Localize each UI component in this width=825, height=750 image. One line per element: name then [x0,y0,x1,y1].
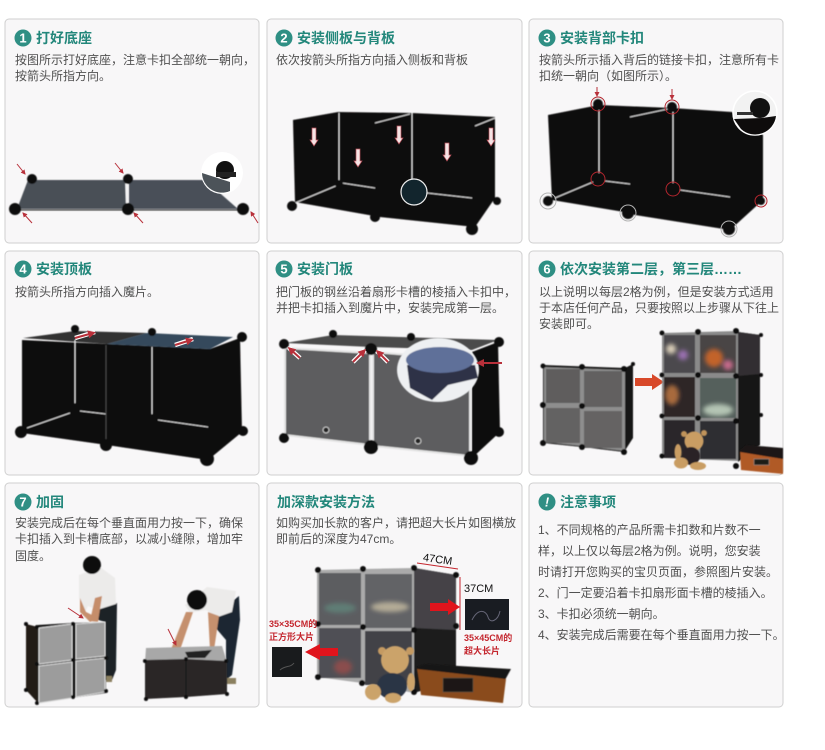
icon: clip detail circle [401,179,427,205]
text: notes list: 时请打开您购买的宝贝页面，参照图片安装。 [538,564,778,579]
arrows: downward pointers [310,126,495,167]
icon: number 2 [276,30,292,46]
arrows: door insertion [289,348,502,363]
text: notes list: 3、卡扣必须统一朝向。 [538,606,665,621]
panel: step 1 base [5,19,259,243]
dimension: height 37CM: 37CM [464,583,493,595]
heading: step 2: 安装侧板与背板 [297,30,395,46]
text: step 7 description: 卡扣插入到卡槽底部，以减小缝隙，增加牢 [15,531,243,546]
text: step 3 description: 按箭头所示插入背后的链接卡扣，注意所有卡 [539,52,779,67]
heading: step 6: 依次安装第二层，第三层…… [560,261,742,277]
text: step 1 description: 按图所示打好底座，注意卡扣全部统一朝向， [15,52,255,67]
panel: extended depth method [267,483,522,707]
illustration: man pressing cabinet [79,556,117,682]
arrows: red pointers [17,163,258,223]
heading: step 4: 安装顶板 [36,261,92,277]
text: step 6 description: 于本店任何产品，只要按照以上步骤从下往上 [539,300,779,315]
text: step 2 description: 依次按箭头所指方向插入侧板和背板 [276,52,468,67]
icon: number 6: 6 [543,262,551,276]
text: step 4 description: 按箭头所指方向插入魔片。 [15,284,159,299]
illustration: side and back panels [287,112,501,235]
text: step 6 description: 以上说明以每层2格为例，但是安装方式适用 [539,284,774,299]
text: step 7 description: 安装完成后在每个垂直面用力按一下，确保 [15,515,243,530]
icon: storage box [740,445,783,474]
arrows: top panel direction [75,332,193,345]
text: step 7 description [15,515,243,563]
icon: teddy bear [674,430,707,470]
icon: number 3 [538,30,556,46]
panel: step 7 reinforce [5,483,259,707]
text: notes list: 样，以上仅以每层2格为例。说明，您安装 [538,543,761,558]
illustration: man bending over cabinet [170,587,240,684]
illustration: assembled back [543,99,765,235]
illustration: base plates [9,174,249,215]
panel: step 2 side and back [267,19,522,243]
dimension: width 47CM: 47CM [422,552,453,568]
heading: step 5: 安装门板 [297,261,353,277]
text: step 5 description: 并把卡扣插入到魔片中，安装完成第一层。 [276,300,504,315]
icon: number 5 [276,260,292,278]
text: notes list: 1、不同规格的产品所需卡扣数和片数不一 [538,522,761,537]
label: square panel size: 正方形大片 [269,631,314,642]
text: step 7 description: 固度。 [15,548,51,563]
panel: step 5 door panel [267,251,522,475]
text: step 3 description: 扣统一朝向（如图所示）。 [539,68,677,83]
label: long panel size: 35×45CM的 [464,632,512,643]
label: long panel size [464,632,512,656]
text: step 5 description [276,284,516,315]
icon: square panel swatch [272,647,302,677]
illustration: patterned cabinet [315,565,459,695]
heading: extended depth: 加深款安装方法 [277,494,375,510]
heading: step 1: 打好底座 [36,30,92,46]
icon: exclamation: ! [545,494,550,510]
illustration: black cabinet [143,646,229,701]
dimension: height 37CM [460,577,493,630]
icon: teddy bear [365,646,415,703]
arrows: press direction [68,608,176,645]
text: notes list [538,522,785,642]
text: step 1 description: 按箭头所指方向。 [15,68,111,83]
arrow: red to next stage [635,374,664,390]
icon: number 6 [538,260,556,278]
illustration: three-level cabinet [660,328,763,469]
icon: number 7: 7 [19,494,27,510]
text: step 5 description: 把门板的钢丝沿着扇形卡槽的棱插入卡扣中， [276,284,516,299]
arrow: red to square panel [305,644,338,660]
illustration: cube with doors [279,330,504,465]
icon: number 1 [14,30,32,46]
panel: step 4 top panel [5,251,259,475]
label: square panel size [269,618,317,642]
text: extended depth description [276,515,516,546]
panel: step 3 back clips [529,19,783,243]
icon: number 4: 4 [19,262,27,276]
icon: number 3: 3 [543,30,551,46]
arrow: red to long panel [430,599,460,615]
heading: step 3: 安装背部卡扣 [560,30,644,46]
icon: large long panel swatch [465,599,509,630]
icon: clip inset [733,91,777,135]
text: step 6 description [539,284,779,331]
label: long panel size: 超大长片 [464,645,500,656]
icon: clip detail inset [201,152,243,194]
text: extended depth description: 如购买加长款的客户，请把超大长片如图横放 [276,515,516,530]
icon: number 1: 1 [19,30,27,46]
icon: wooden storage box [417,664,511,703]
text: step 3 description [539,52,779,83]
icon: number 7 [14,494,32,510]
illustration: cube with top panels [15,325,248,466]
icon: number 5: 5 [280,262,288,276]
illustration: two-level cabinet [540,362,635,455]
label: square panel size: 35×35CM的 [269,618,317,629]
icon: number 4 [14,260,32,278]
heading: notes: 注意事项 [560,494,616,510]
text: step 6 description: 安装即可。 [539,316,599,331]
icon: number 2: 2 [280,30,288,46]
markers: red and gray rings [540,97,767,237]
text: extended depth description: 即前后的深度为47cm。 [276,531,401,546]
heading: step 7: 加固 [36,494,64,510]
arrows: red pointers [597,87,672,99]
panel: step 6 more layers [529,251,783,475]
text: notes list: 2、门一定要沿着卡扣扇形面卡槽的棱插入。 [538,585,773,600]
icon: clip detail inset [397,338,479,402]
illustration: cabinet with gray doors [24,622,108,705]
text: notes list: 4、安装完成后需要在每个垂直面用力按一下。 [538,627,785,642]
text: step 1 description [15,52,255,83]
icon: exclamation [538,494,556,510]
panel: notes [529,483,785,707]
